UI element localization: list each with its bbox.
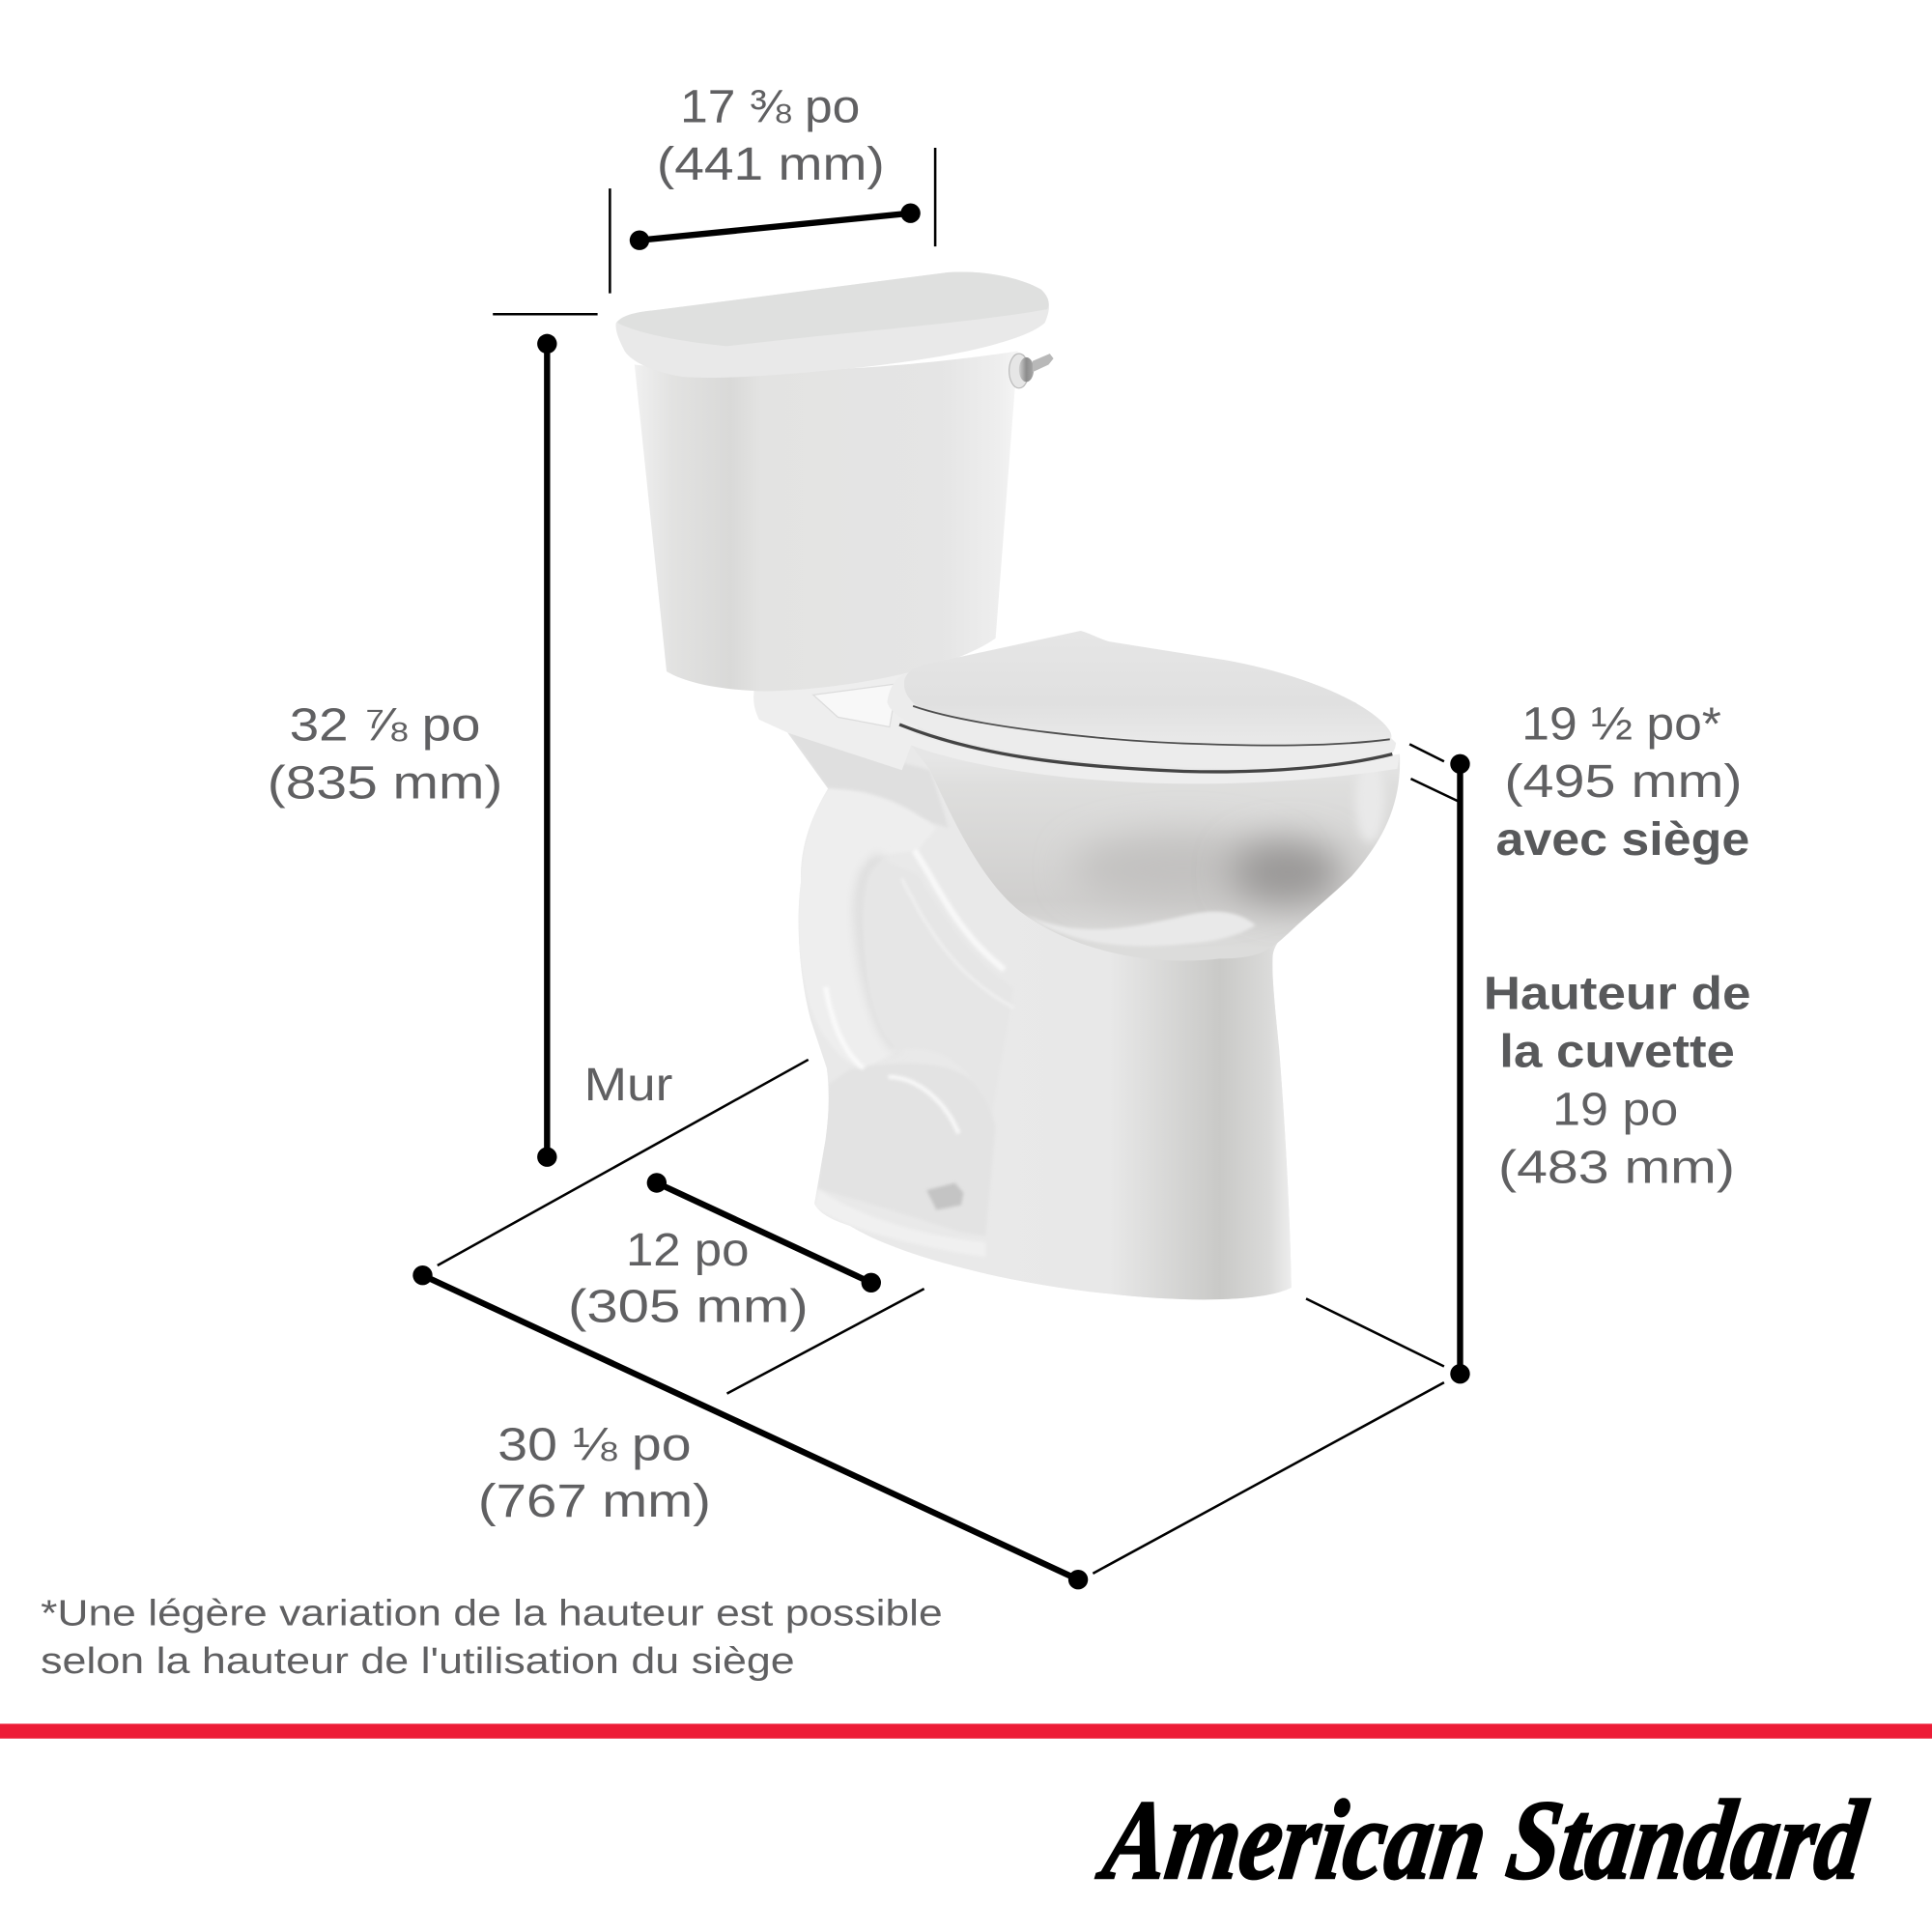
seat ring bbox=[887, 671, 1396, 768]
label: total height: 32 ⅞ po bbox=[290, 699, 480, 752]
tank lid bbox=[616, 271, 1049, 378]
toilet illustration bbox=[616, 271, 1400, 1324]
label: total height bbox=[268, 699, 502, 810]
label: tank width: 17 ⅜ po bbox=[680, 80, 860, 132]
label: bowl height: (483 mm) bbox=[1498, 1141, 1735, 1193]
label: tank width: (441 mm) bbox=[657, 138, 885, 190]
rear tube bbox=[833, 789, 923, 820]
flush handle bbox=[1009, 354, 1054, 388]
label: tank width bbox=[657, 80, 885, 190]
label: wall: Mur bbox=[584, 1059, 672, 1111]
label: bowl height: 19 po bbox=[1552, 1084, 1678, 1136]
label: height with seat: avec siège bbox=[1495, 813, 1749, 866]
footnote: *Une légère variation de la hauteur est possible bbox=[41, 1592, 943, 1634]
underside of tank neck bbox=[792, 734, 946, 825]
lower trap bbox=[826, 1115, 829, 1136]
label: total height: (835 mm) bbox=[268, 757, 502, 810]
seat lid bbox=[904, 631, 1391, 746]
bowl bbox=[935, 753, 1401, 960]
red divider bar bbox=[0, 1723, 1932, 1739]
dimension: tank width bbox=[610, 80, 935, 294]
dimension: rough-in bbox=[568, 1173, 881, 1333]
glaze highlights bbox=[914, 850, 1005, 970]
tank body bbox=[635, 352, 1018, 692]
recess panel bbox=[864, 860, 1014, 1115]
label: bowl height: la cuvette bbox=[1499, 1026, 1735, 1078]
wall and floor guide lines bbox=[438, 744, 1460, 1574]
footnote: selon la hauteur de l'utilisation du siège bbox=[41, 1640, 795, 1682]
dimension: total height bbox=[268, 314, 598, 1167]
label: total depth: 30 ⅛ po bbox=[497, 1418, 692, 1470]
label: height with seat bbox=[1495, 697, 1749, 866]
label: rough-in: (305 mm) bbox=[568, 1281, 809, 1333]
dimension: bowl height bbox=[1450, 754, 1470, 1383]
label: rough-in bbox=[568, 1224, 809, 1333]
label: total depth bbox=[478, 1418, 711, 1527]
label: rough-in: 12 po bbox=[626, 1224, 750, 1276]
dimension: total depth bbox=[412, 1265, 1088, 1589]
footnote bbox=[41, 1592, 943, 1682]
label: bowl height: Hauteur de bbox=[1484, 968, 1750, 1020]
label: total depth: (767 mm) bbox=[478, 1475, 711, 1527]
label: height with seat: 19 ½ po* bbox=[1521, 697, 1721, 750]
gap between seat and bowl bbox=[899, 724, 1392, 772]
tank neck bbox=[753, 666, 918, 770]
label: bowl height bbox=[1484, 968, 1750, 1193]
toilet base and trapway bbox=[788, 726, 1312, 1300]
label: height with seat: (495 mm) bbox=[1504, 755, 1743, 808]
